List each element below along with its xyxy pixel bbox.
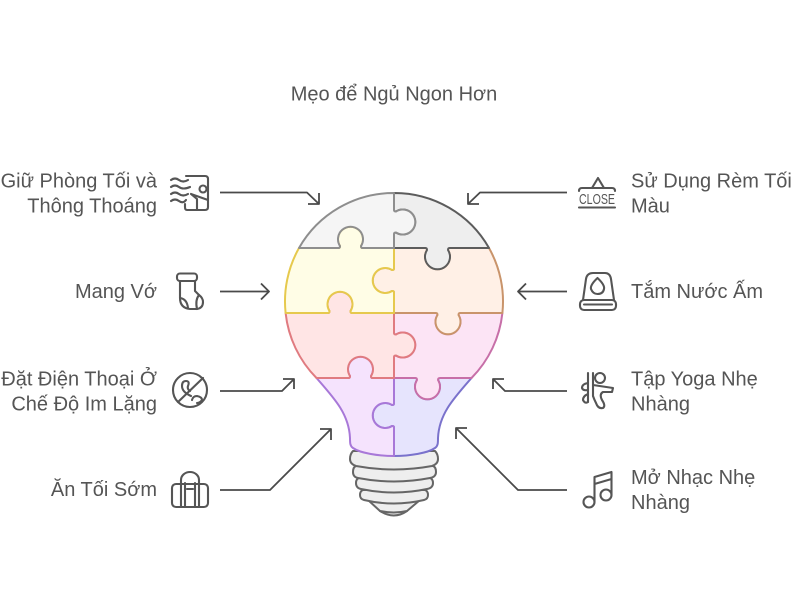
arrow: early dinner (220, 429, 331, 490)
arrow: warm bath (518, 284, 567, 300)
icon: yoga pose (582, 373, 613, 408)
label: socks: Mang Vớ (75, 281, 157, 303)
label: phone silent: Chế Độ Im Lặng (11, 394, 157, 416)
icon: close sign (579, 178, 615, 208)
puzzle piece: orange (373, 248, 503, 334)
label: keep room dark: Giữ Phòng Tối và (1, 170, 157, 192)
label: yoga: Tập Yoga Nhẹ (631, 368, 758, 390)
arrow: socks (220, 284, 269, 300)
bulb base (350, 451, 438, 516)
icon: bag (172, 472, 208, 507)
icon: sock (177, 274, 203, 309)
puzzle piece: blue (373, 378, 472, 456)
puzzle piece: red (286, 292, 415, 378)
label: keep room dark: Thông Thoáng (27, 196, 157, 218)
label: blackout curtains: Màu (631, 196, 670, 218)
puzzle piece: dark grey (394, 193, 489, 269)
icon: music note (584, 472, 612, 508)
label: blackout curtains: Sử Dụng Rèm Tối (631, 170, 792, 192)
label: music: Mở Nhạc Nhẹ (631, 467, 755, 489)
puzzle piece: yellow (285, 227, 394, 313)
icon: window with breeze (171, 176, 208, 210)
arrow: phone silent (220, 379, 294, 391)
label: warm bath: Tắm Nước Ấm (631, 280, 763, 303)
arrow: keep room dark (220, 192, 319, 204)
icon: silenced phone (173, 373, 207, 407)
label: early dinner: Ăn Tối Sớm (51, 478, 157, 501)
icon: bath with drop (580, 273, 616, 310)
label: yoga: Nhàng (631, 394, 690, 416)
label: music: Nhàng (631, 492, 690, 514)
arrow: music (456, 428, 567, 490)
title: Mẹo để Ngủ Ngon Hơn (291, 84, 497, 106)
arrow: blackout curtains (468, 192, 567, 204)
puzzle piece: purple (316, 357, 394, 456)
puzzle piece: pink (394, 313, 502, 399)
icon: close sign: CLOSE (579, 191, 615, 208)
puzzle piece: light grey (299, 193, 415, 248)
label: phone silent: Đặt Điện Thoại Ở (1, 368, 157, 390)
light bulb (285, 193, 503, 516)
arrow: yoga (493, 379, 567, 391)
